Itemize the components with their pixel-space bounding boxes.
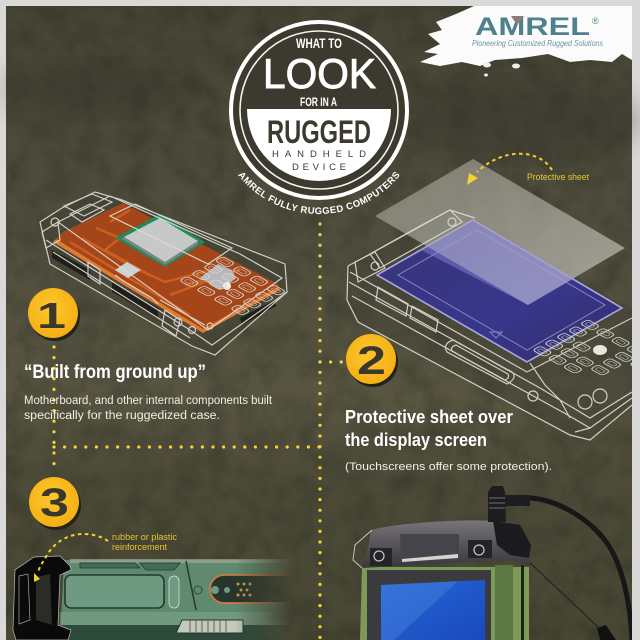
- label: rubber or plastic reinforcement: rubber or plastic: [112, 532, 178, 542]
- green case: [60, 560, 285, 625]
- number badge 2: [346, 334, 398, 387]
- body text: built from ground up: [24, 395, 273, 422]
- logo triangle: [511, 16, 524, 25]
- badge: look: LOOK: [263, 50, 376, 97]
- small chip: [115, 262, 141, 278]
- blue display: [381, 580, 485, 640]
- black rubber bumper: [13, 556, 71, 640]
- device 4: front view with antenna cable: [353, 486, 632, 640]
- case wireframe: [40, 192, 287, 355]
- badge: curved caption: AMREL FULLY RUGGED COMPUTERS: [238, 172, 400, 214]
- case side clip: [493, 521, 531, 558]
- device head: [362, 520, 530, 568]
- numeral 2: 2: [357, 338, 386, 383]
- heading: protective sheet over the display screen: Protective sheet over: [345, 406, 513, 427]
- display screen: [377, 220, 622, 362]
- badge: for in a: FOR IN A: [300, 97, 337, 109]
- badge: what to look for in a rugged handheld device: [229, 20, 409, 214]
- screen bezel: [367, 570, 491, 640]
- heading: built from ground up: “Built from ground up”: [24, 362, 206, 383]
- body text: built from ground up: Motherboard, and other internal components built: [24, 395, 273, 407]
- device 1: transparent case with motherboard: [40, 192, 287, 355]
- heading: protective sheet over the display screen: the display screen: [345, 429, 487, 450]
- dotted connector lines: [54, 224, 346, 640]
- number badge 3: [29, 477, 81, 530]
- heading: protective sheet over the display screen: [345, 406, 513, 450]
- badge: handheld: HANDHELD: [272, 149, 366, 160]
- badge: device: DEVICE: [292, 162, 346, 173]
- device 3: side view with rubber bumper: [13, 556, 306, 640]
- orange circuit board: [53, 203, 280, 333]
- badge: what to: WHAT TO: [296, 35, 342, 51]
- connector port: [209, 574, 288, 604]
- logo tagline: Pioneering Customized Rugged Solutions: [472, 39, 603, 48]
- logo: brush stroke with AMREL: [420, 6, 632, 76]
- registered mark: ®: [592, 16, 599, 26]
- device 2: case with display screen: [347, 159, 640, 440]
- body text: built from ground up: specifically for the ruggedized case.: [24, 410, 220, 422]
- label: rubber or plastic reinforcement: [112, 532, 178, 552]
- processor chip: [115, 214, 205, 267]
- logo wordmark: AMREL: [475, 13, 590, 41]
- secondary chip: [200, 264, 236, 290]
- tether cord: [527, 560, 598, 627]
- badge: rugged: RUGGED: [267, 114, 371, 150]
- bottom vent: [176, 620, 243, 633]
- side window panel: [65, 575, 164, 608]
- green body: [360, 567, 529, 640]
- case wireframe: [347, 210, 640, 440]
- numeral 3: 3: [40, 480, 69, 525]
- arrow: rubber reinforcement callout: [34, 534, 108, 582]
- arrow: protective sheet callout: [467, 154, 552, 185]
- label: protective sheet: Protective sheet: [527, 172, 589, 182]
- protective sheet: [375, 159, 625, 305]
- numeral 1: 1: [37, 295, 66, 336]
- label: rubber or plastic reinforcement: reinforcement: [112, 542, 167, 552]
- body text: touchscreens: (Touchscreens offer some protection).: [345, 461, 552, 473]
- stylus plug: [597, 625, 616, 640]
- antenna cable: [530, 498, 632, 640]
- antenna connector: [488, 486, 506, 522]
- number badge 1: [28, 288, 80, 341]
- dark underside: [52, 250, 158, 318]
- d-pad button: [593, 345, 607, 355]
- case body fill: [348, 280, 632, 434]
